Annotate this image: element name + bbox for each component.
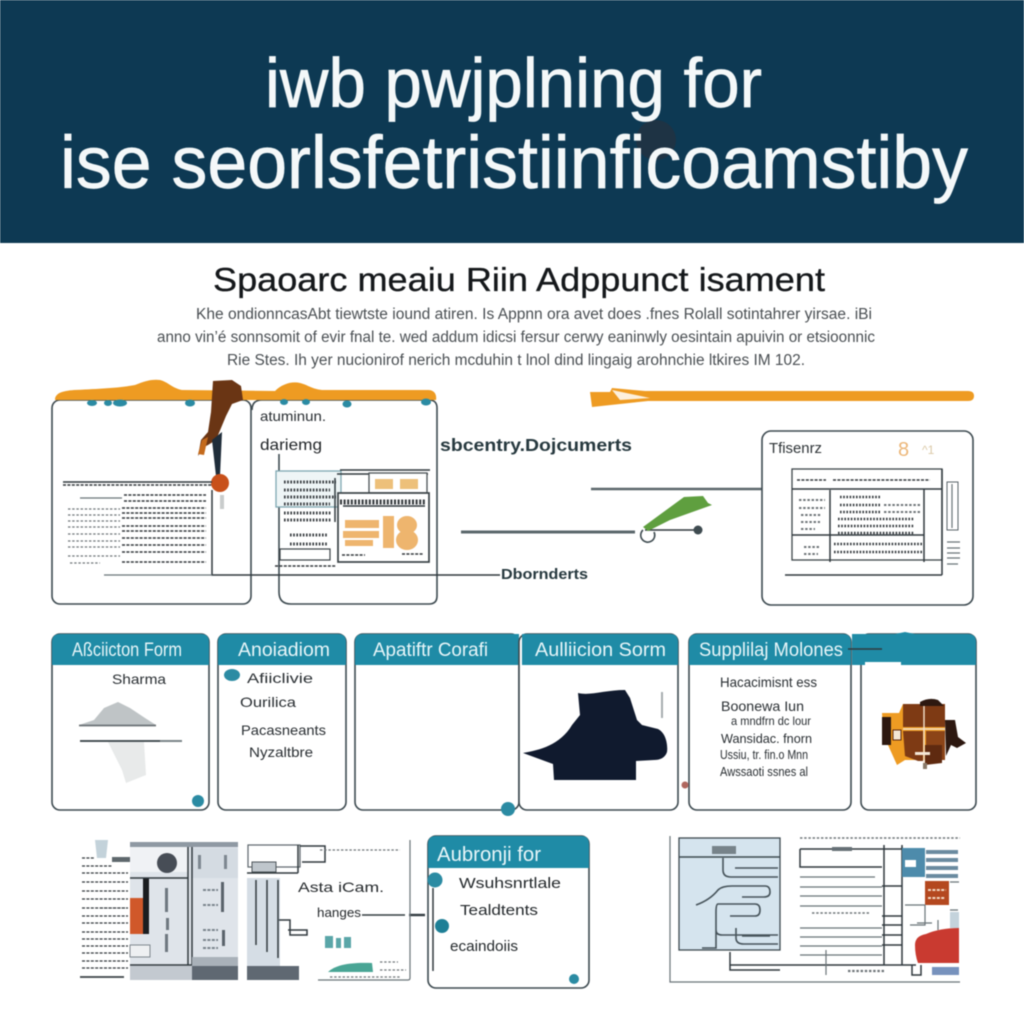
header banner bbox=[0, 0, 1024, 243]
lower left schematic illustration bbox=[80, 840, 425, 980]
panel row: application cards bbox=[52, 632, 976, 816]
panel: card 4 bbox=[519, 634, 678, 810]
panel: card 5: Awssaoti ssnes al bbox=[720, 764, 808, 779]
panel: card 5: Hacacimisnt ess bbox=[720, 674, 817, 690]
orange 8 bbox=[343, 516, 418, 550]
connector to callout bbox=[362, 914, 405, 916]
panel: card 4: Aulliicion Sorm bbox=[535, 640, 666, 661]
panel: card 5 bbox=[682, 634, 851, 810]
intro paragraph: Rie Stes. Ih yer nucionirof nerich mcduhin t lnol dind lingaig arohnchie ltkires IM 102. bbox=[227, 352, 805, 369]
intro paragraph: anno vin’é sonnsomit of evir fnal te. wed addum idicsi fersur cerwy eaninwly oesintain apuivin or etsioonnic bbox=[157, 329, 875, 346]
document lines bbox=[730, 838, 960, 975]
title: iwb pwjplning for bbox=[265, 44, 762, 122]
subtitle heading: Spaoarc meaiu Riin Adppunct isament bbox=[213, 261, 825, 298]
icon: orange floor plan bbox=[882, 699, 966, 769]
panel: card 2: Anoiadiom bbox=[238, 640, 330, 661]
blue bar bbox=[932, 967, 959, 975]
upper right orange bar bbox=[590, 388, 974, 407]
panel: upper right document: ^1 bbox=[922, 443, 935, 457]
panel: card 6 bbox=[848, 632, 976, 810]
small teal mark bbox=[325, 936, 351, 948]
machine cabinet bbox=[130, 842, 238, 980]
panel: card 2: Nyzaltbre bbox=[249, 744, 313, 760]
left document panels: dariemg bbox=[260, 437, 322, 454]
panel: card 1: Sharma bbox=[112, 671, 166, 687]
lower right dashboard illustration bbox=[670, 836, 960, 982]
schematic labels: Asta iCam. bbox=[298, 879, 384, 895]
connector arrow with green pointer bbox=[461, 489, 770, 542]
panel: card 5: Wansidac. fnorn bbox=[721, 731, 812, 746]
panel: card 1: Aßciicton Form bbox=[72, 640, 182, 661]
center label: borders: Dbornderts bbox=[501, 566, 588, 583]
blue dots along band bbox=[87, 398, 431, 408]
lower left schematic illustration: hanges bbox=[317, 905, 362, 920]
panel: card 2: Afiiclivie bbox=[247, 670, 313, 686]
callout panel: Tealdtents bbox=[460, 902, 538, 919]
left document text lines bbox=[63, 482, 500, 575]
icon: mountain map bbox=[79, 702, 182, 783]
callout panel: Aubronji for bbox=[437, 844, 541, 866]
callout panel bbox=[428, 836, 589, 988]
schematic text column bbox=[80, 840, 130, 977]
title bbox=[60, 44, 968, 204]
right document text: atuminun. bbox=[260, 408, 326, 424]
title: ise seorlsfetristiinficoamstiby bbox=[60, 121, 968, 204]
callout panel: ecaindoiis bbox=[450, 938, 518, 955]
panel: card 2: Ourilica bbox=[240, 694, 296, 710]
intro paragraph bbox=[157, 306, 875, 369]
second machine section bbox=[247, 845, 400, 980]
left document panels bbox=[52, 380, 500, 604]
panel: card 3: Apatiftr Corafi bbox=[373, 640, 488, 661]
panel: card 5: Supplilaj Molones bbox=[699, 640, 843, 661]
panel: upper right document: 8 bbox=[898, 439, 909, 461]
brown figure marker bbox=[198, 380, 243, 509]
light blue flow panel bbox=[679, 838, 780, 950]
panel: left document bbox=[52, 400, 251, 604]
panel: card 2 bbox=[218, 634, 346, 810]
panel: card 2: Pacasneants bbox=[241, 722, 326, 738]
table bbox=[785, 469, 960, 575]
blue block bbox=[902, 848, 925, 877]
teal mound bbox=[328, 963, 373, 972]
panel: card 5: Boonewa Iun bbox=[721, 698, 804, 714]
intro paragraph: Khe ondionncasAbt tiewtste iound atiren. Is Appnn ora avet does .fnes Rolall sotintahrer yirsae. iBi bbox=[196, 306, 872, 323]
panel: right document bbox=[252, 400, 437, 604]
panel: upper right document bbox=[762, 431, 973, 605]
panel: upper right document: Tfisenrz bbox=[769, 440, 822, 457]
icon: dark silhouette bbox=[523, 690, 667, 780]
center label: documents: sbcentry.Dojcumerts bbox=[440, 435, 632, 455]
red shape bbox=[915, 928, 959, 963]
callout panel: Wsuhsnrtlale bbox=[459, 875, 561, 892]
panel: card 5: Ussiu, tr. fin.o Mnn bbox=[720, 747, 808, 762]
orange top band bbox=[55, 380, 436, 400]
panel: card 5: a mndfrn dc lour bbox=[731, 714, 811, 728]
panel: card 3 bbox=[355, 634, 519, 816]
mini table chart bbox=[275, 470, 430, 566]
panel: card 1 bbox=[52, 634, 209, 810]
orange status tile bbox=[925, 881, 949, 905]
